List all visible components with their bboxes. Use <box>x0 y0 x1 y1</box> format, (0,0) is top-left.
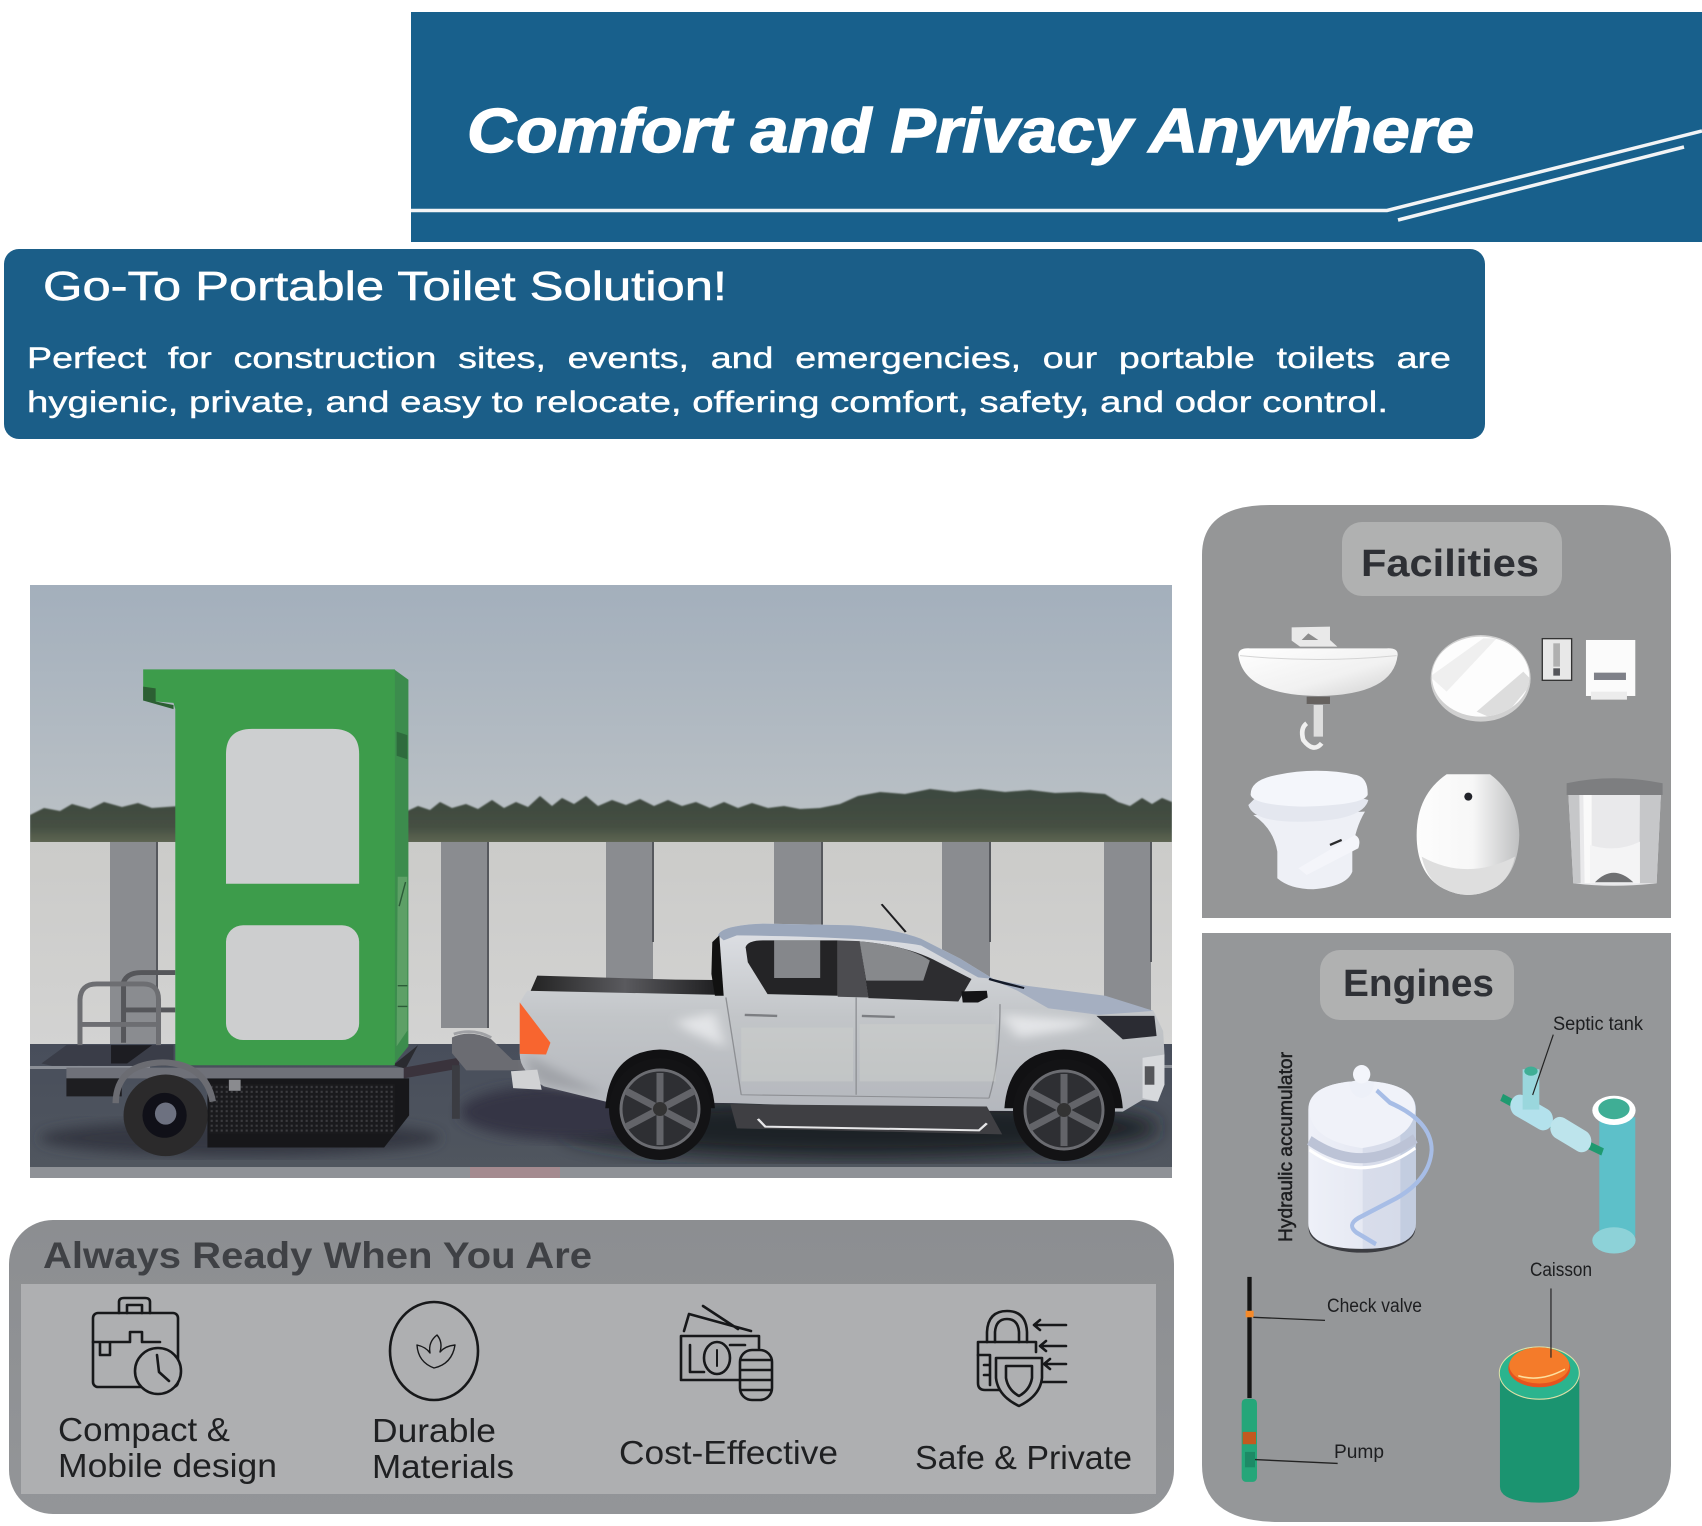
body <box>520 924 1164 1112</box>
front wheel <box>1013 1070 1115 1161</box>
title: Comfort and Privacy Anywhere <box>467 97 1474 166</box>
feature: durable materials: Materials <box>372 1448 514 1485</box>
engine labels: Hydraulic accumulator <box>1276 1051 1297 1242</box>
icon: pump with check valve <box>1242 1277 1257 1482</box>
subheading: Go-To Portable Toilet Solution! <box>43 263 727 309</box>
icon: padlock with shield <box>978 1311 1066 1406</box>
feature: safe and private <box>915 1311 1132 1476</box>
door lines <box>726 997 1000 1098</box>
icon: toilet <box>1248 771 1368 889</box>
windows <box>746 940 838 996</box>
deck <box>66 1068 404 1078</box>
icon: urinal <box>1417 774 1519 895</box>
engines heading: Engines <box>1343 963 1494 1005</box>
feature: durable materials: Durable <box>372 1412 496 1449</box>
intro panel <box>4 249 1485 439</box>
rear wheel <box>609 1068 711 1160</box>
feature: compact and mobile: Compact & <box>58 1411 230 1448</box>
feature: compact and mobile: Mobile design <box>58 1447 277 1484</box>
icon: caisson <box>1499 1347 1579 1503</box>
icon: briefcase with clock <box>93 1298 181 1394</box>
icon: paper towel dispenser <box>1586 640 1635 700</box>
engine labels: Check valve <box>1327 1296 1422 1317</box>
icon: hydraulic accumulator <box>1308 1065 1432 1253</box>
feature: safe and private: Safe & Private <box>915 1439 1132 1476</box>
facilities heading: Facilities <box>1361 543 1539 585</box>
engine labels <box>1276 1014 1643 1463</box>
panel: always ready features <box>9 1220 1174 1514</box>
description text: Perfect for construction sites, events, and emergencies, our portable toilets are <box>27 342 1451 375</box>
icon: round mirror <box>1430 635 1533 722</box>
icon: circle with lotus <box>390 1302 478 1400</box>
body highlights <box>675 1013 1096 1048</box>
tail light <box>520 1002 550 1055</box>
feature: cost-effective <box>619 1306 838 1471</box>
lower white panel <box>226 925 359 1040</box>
icon: wash basin <box>1238 627 1398 748</box>
bed <box>529 976 721 996</box>
mirror <box>961 991 988 1002</box>
leader lines <box>1253 1035 1553 1463</box>
wheel <box>124 1075 208 1156</box>
feature: cost-effective: Cost-Effective <box>619 1434 838 1471</box>
photo: portable toilet trailer towed by pickup <box>30 585 1172 1178</box>
facilities heading <box>1342 522 1562 596</box>
icon: pedal bin <box>1567 778 1663 886</box>
panel: engines <box>1202 933 1671 1522</box>
upper white panel <box>226 729 359 884</box>
panel heading: Always Ready When You Are <box>43 1235 592 1276</box>
icon: banknotes and coins <box>681 1306 772 1400</box>
cabin side <box>393 669 408 1065</box>
headlight <box>1096 1016 1157 1039</box>
engine labels: Septic tank <box>1553 1014 1643 1035</box>
wall pillars <box>110 842 1151 1046</box>
cabin front <box>143 669 395 1065</box>
hitch <box>452 1034 526 1070</box>
feature: durable materials <box>372 1302 514 1485</box>
feature: compact and mobile <box>58 1298 277 1484</box>
icon: soap dispenser <box>1542 639 1572 680</box>
rear bumper <box>511 1070 542 1090</box>
rails <box>78 970 176 1046</box>
panel: facilities <box>1202 505 1671 918</box>
description text <box>27 342 1451 419</box>
pickup truck <box>511 904 1164 1134</box>
trailer and toilet cabin <box>41 669 536 1156</box>
tree line <box>30 789 1172 843</box>
bumper <box>1143 1055 1164 1101</box>
antenna <box>882 904 906 932</box>
icon: septic tank pipe assembly <box>1502 1067 1636 1253</box>
mesh tank under deck <box>207 1078 409 1147</box>
engine labels: Pump <box>1334 1442 1384 1463</box>
side step <box>730 1104 1002 1134</box>
description text: hygienic, private, and easy to relocate, offering comfort, safety, and odor control. <box>27 386 1388 419</box>
engines heading <box>1320 950 1514 1020</box>
wheel arches <box>605 1049 715 1108</box>
engine labels: Caisson <box>1530 1260 1592 1281</box>
header banner <box>411 12 1702 242</box>
fender <box>116 1062 213 1103</box>
